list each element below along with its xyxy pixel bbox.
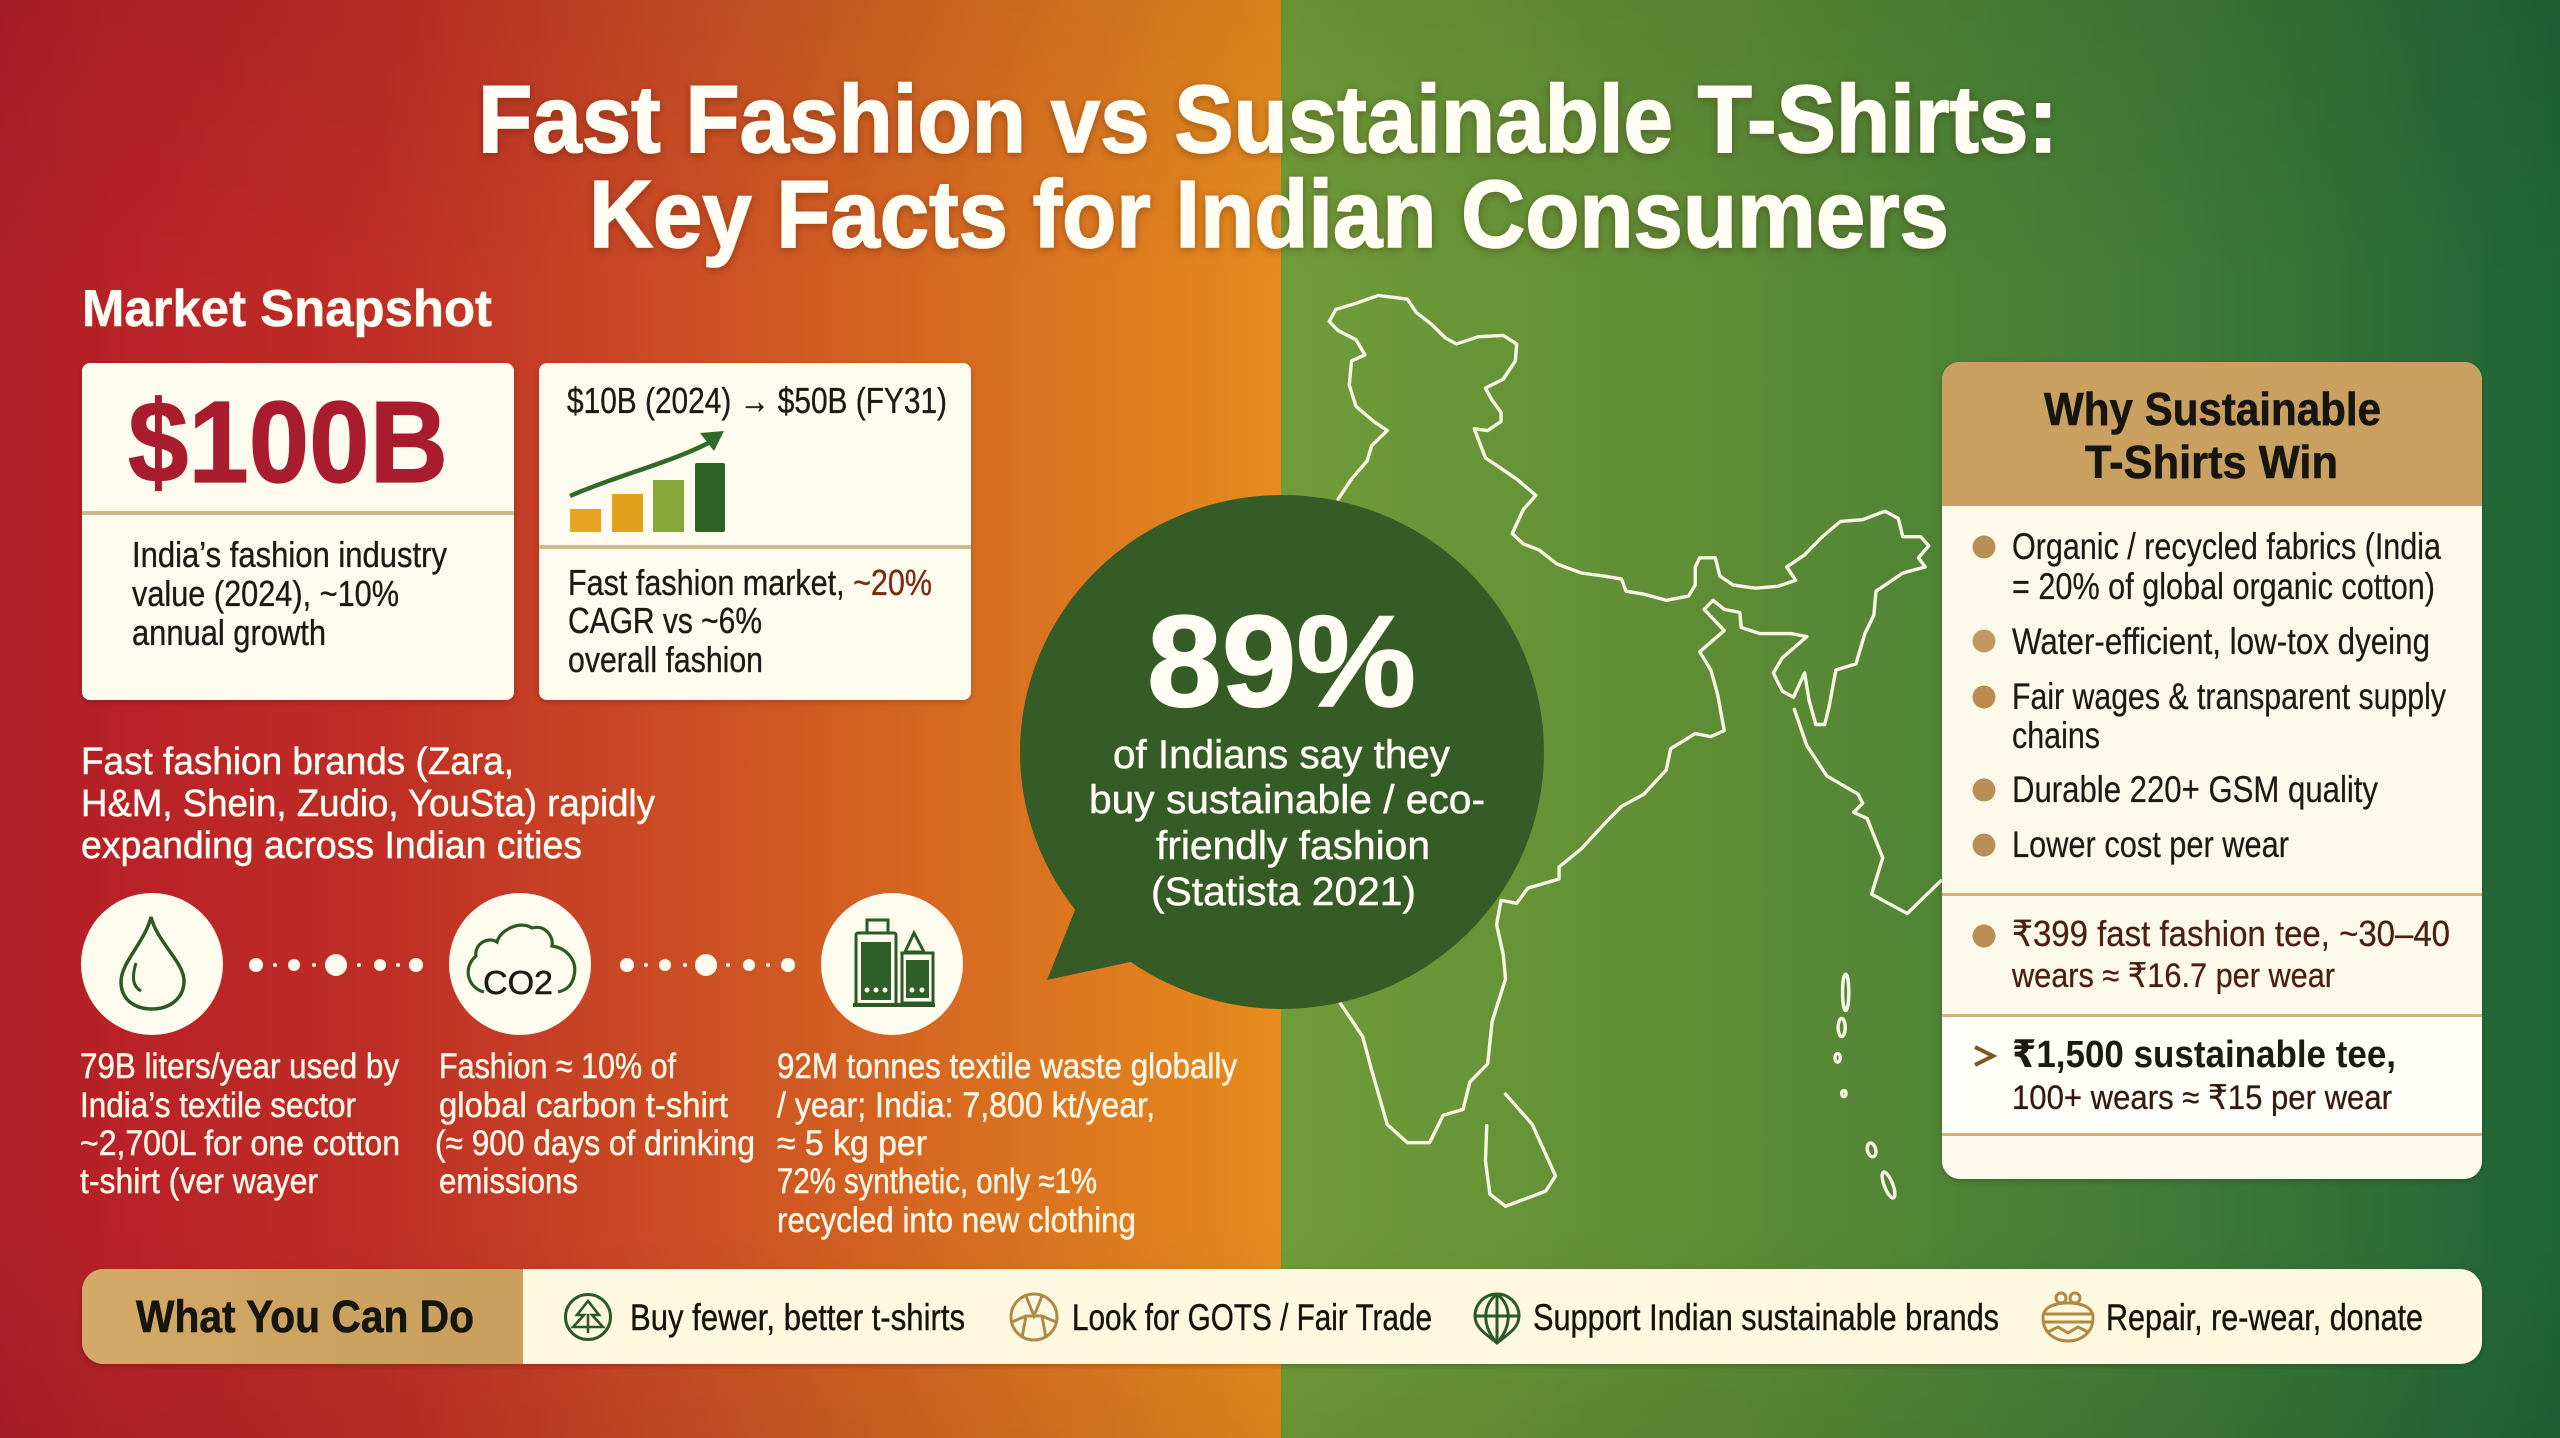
description: Fast fashion market, ~20% (568, 562, 932, 603)
text block: textile waste: 92M tonnes textile waste globally (777, 1047, 1237, 1086)
text block: carbon emissions: global carbon t-shirt (439, 1086, 728, 1125)
connector dots 1 (249, 954, 423, 976)
text block: fast fashion brands: H&M, Shein, Zudio, YouSta) rapidly (81, 783, 655, 825)
callout text: friendly fashion (1156, 824, 1430, 868)
text block: textile waste: ≈ 5 kg per (777, 1124, 927, 1163)
text block: textile waste (777, 1047, 1237, 1240)
sustainable cost per wear: 100+ wears ≈ ₹15 per wear (2012, 1079, 2392, 1117)
description: India’s fashion industry (132, 534, 447, 575)
panel: Why Sustainable T-Shirts Win (1942, 362, 2482, 1179)
action text: Support Indian sustainable brands (1533, 1297, 1999, 1338)
callout text: of Indians say they (1113, 733, 1450, 777)
action text: Buy fewer, better t-shirts (630, 1297, 965, 1338)
callout text: (Statista 2021) (1151, 870, 1416, 914)
benefits list: chains (2012, 715, 2100, 756)
panel: $100B industry value card (82, 363, 514, 700)
icon: leaf badge (566, 1294, 610, 1340)
icon: CO2 cloud: CO2 (483, 964, 553, 1001)
benefits list: Water-efficient, low-tox dyeing (2012, 621, 2430, 662)
bar heading: What You Can Do (136, 1291, 474, 1342)
fast fashion cost per wear: ₹399 fast fashion tee, ~30–40 (2012, 913, 2450, 954)
fast fashion cost per wear (1972, 913, 2450, 995)
icon: mending basket (2043, 1293, 2093, 1341)
title: Key Facts for Indian Consumers (589, 161, 1949, 268)
title: Fast Fashion vs Sustainable T-Shirts: (478, 66, 2058, 173)
text block: water use: t-shirt (ver wayer (80, 1162, 318, 1201)
big number: $100B (128, 377, 448, 507)
benefits list: Fair wages & transparent supply (2012, 676, 2446, 717)
panel heading: Why Sustainable (2044, 383, 2381, 435)
icon: location globe (1475, 1294, 1519, 1343)
text block: carbon emissions: Fashion ≈ 10% of (439, 1047, 676, 1086)
description: overall fashion (568, 639, 763, 680)
benefits list: Organic / recycled fabrics (India (2012, 526, 2441, 567)
text block: textile waste: 72% synthetic, only ≈1% (777, 1162, 1097, 1201)
icon: water drop (81, 893, 223, 1035)
bar chart with arrow (570, 431, 725, 532)
panel: fast fashion market growth card (539, 363, 971, 700)
description: CAGR vs ~6% (568, 600, 762, 641)
text block: carbon emissions: emissions (439, 1162, 578, 1201)
text block: textile waste: recycled into new clothing (777, 1201, 1136, 1240)
action text: Look for GOTS / Fair Trade (1072, 1297, 1432, 1338)
benefits list: Lower cost per wear (2012, 824, 2289, 865)
text block: water use: 79B liters/year used by (80, 1047, 399, 1086)
sustainable cost per wear (1975, 1034, 2396, 1117)
benefits list: = 20% of global organic cotton) (2012, 566, 2435, 607)
big number: 89% (1147, 588, 1416, 734)
fast fashion cost per wear: wears ≈ ₹16.7 per wear (2011, 957, 2335, 995)
text block: water use: India’s textile sector (80, 1086, 356, 1125)
connector dots 2 (620, 954, 795, 976)
text block: fast fashion brands: Fast fashion brands (Zara, (81, 741, 514, 783)
sustainable cost per wear: ₹1,500 sustainable tee, (2012, 1034, 2396, 1076)
icon: certification seal (1011, 1294, 1057, 1340)
map of India outline (1329, 295, 1941, 1206)
growth figures: $10B (2024) → $50B (FY31) (567, 380, 947, 421)
text block: carbon emissions (435, 1047, 755, 1201)
heading: Market Snapshot: Market Snapshot (82, 280, 492, 338)
panel: What You Can Do action bar (82, 1269, 2482, 1364)
title (478, 66, 2058, 268)
benefits list (1972, 526, 2446, 865)
callout: 89% speech bubble (1020, 495, 1544, 1009)
text block: water use: ~2,700L for one cotton (80, 1124, 400, 1163)
text block: textile waste: / year; India: 7,800 kt/year, (777, 1086, 1155, 1125)
benefits list: Durable 220+ GSM quality (2012, 769, 2378, 810)
description (568, 562, 932, 680)
text block: fast fashion brands: expanding across Indian cities (81, 825, 582, 867)
text block: fast fashion brands (81, 741, 655, 867)
panel heading (2044, 383, 2381, 488)
callout text (1089, 733, 1485, 914)
text block: water use (80, 1047, 400, 1201)
description: value (2024), ~10% (132, 573, 399, 614)
action text: Repair, re-wear, donate (2106, 1297, 2423, 1338)
icon: textile waste (821, 893, 963, 1035)
panel heading: T-Shirts Win (2085, 436, 2338, 488)
icon: CO2 cloud (449, 893, 591, 1035)
text block: carbon emissions: (≈ 900 days of drinking (435, 1124, 755, 1163)
callout text: buy sustainable / eco- (1089, 778, 1485, 822)
description: annual growth (132, 612, 326, 653)
description (132, 534, 447, 653)
